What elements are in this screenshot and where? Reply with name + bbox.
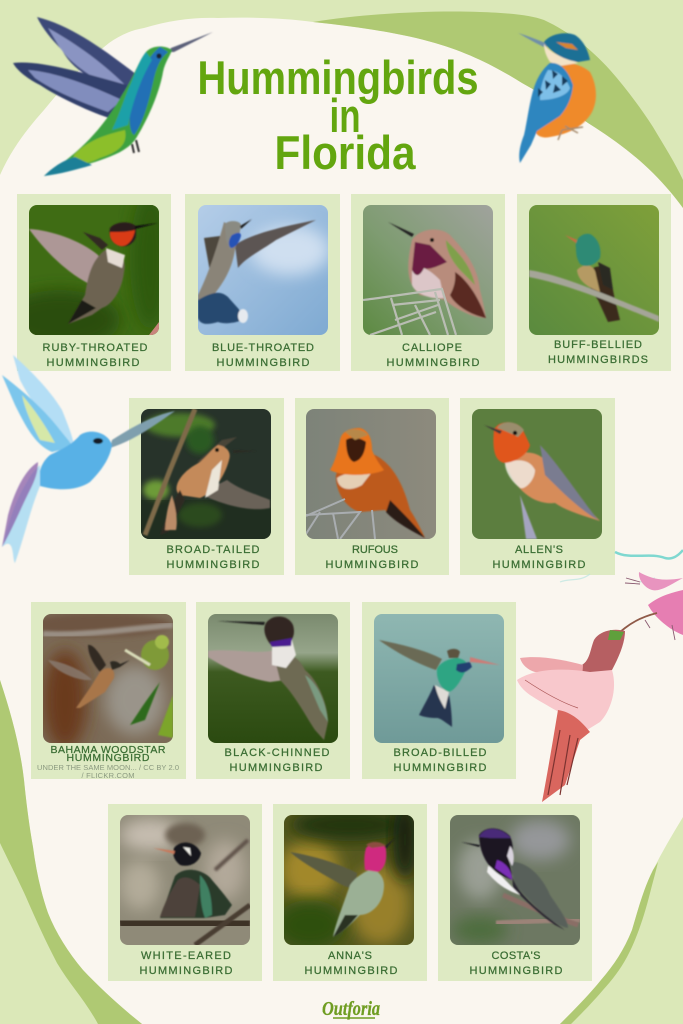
card: bahama woodstar hummingbird bbox=[30, 602, 186, 780]
card: ruby-throated hummingbird bbox=[17, 194, 171, 371]
photo: anna's bbox=[284, 815, 414, 945]
label bbox=[394, 747, 487, 774]
label: BLACK-CHINNED bbox=[224, 747, 330, 759]
card: black-chinned hummingbird bbox=[196, 602, 350, 779]
label: HUMMINGBIRD bbox=[394, 762, 487, 774]
card: blue-throated hummingbird bbox=[185, 194, 340, 371]
label: BAHAMA WOODSTAR bbox=[50, 744, 166, 756]
label bbox=[470, 950, 563, 977]
label bbox=[140, 950, 233, 977]
label: HUMMINGBIRD bbox=[386, 357, 480, 369]
photo: ruby-throated bbox=[29, 205, 159, 335]
label: BROAD-TAILED bbox=[166, 544, 260, 556]
label: ALLEN'S bbox=[515, 544, 563, 556]
label: HUMMINGBIRD bbox=[230, 762, 323, 774]
photo: broad-tailed bbox=[141, 409, 271, 539]
label: BROAD-BILLED bbox=[394, 747, 487, 759]
label bbox=[37, 744, 179, 780]
photo: black-chinned bbox=[208, 614, 338, 743]
label: HUMMINGBIRD bbox=[216, 357, 310, 369]
label bbox=[304, 950, 398, 977]
label bbox=[548, 339, 648, 366]
photo: blue-throated bbox=[198, 205, 330, 335]
photo: bahama woodstar bbox=[43, 614, 173, 743]
label bbox=[166, 544, 260, 571]
label: HUMMINGBIRD bbox=[492, 559, 586, 571]
label bbox=[224, 747, 330, 774]
label: HUMMINGBIRD bbox=[326, 559, 419, 571]
photo: calliope bbox=[363, 205, 493, 335]
label: HUMMINGBIRD bbox=[140, 965, 233, 977]
label: / FLICKR.COM bbox=[82, 771, 134, 780]
label: BLUE-THROATED bbox=[212, 342, 314, 354]
title: Florida bbox=[274, 126, 416, 179]
label: CALLIOPE bbox=[402, 342, 462, 354]
title bbox=[198, 51, 478, 179]
card: costa's hummingbird bbox=[438, 804, 592, 981]
label bbox=[386, 342, 480, 369]
card: anna's hummingbird bbox=[273, 800, 427, 981]
card: allen's hummingbird bbox=[460, 398, 615, 575]
label bbox=[492, 544, 586, 571]
label: UNDER THE SAME MOON... / CC BY 2.0 bbox=[37, 763, 179, 772]
title: in bbox=[330, 89, 360, 142]
photo: white-eared bbox=[120, 815, 250, 945]
label bbox=[212, 342, 314, 369]
card: broad-billed hummingbird bbox=[362, 602, 516, 779]
card: broad-tailed hummingbird bbox=[129, 398, 284, 575]
card: rufous hummingbird bbox=[295, 398, 449, 575]
card: buff-bellied hummingbirds bbox=[517, 194, 671, 371]
label: HUMMINGBIRD bbox=[46, 357, 140, 369]
label: WHITE-EARED bbox=[141, 950, 231, 962]
label: HUMMINGBIRD bbox=[304, 965, 398, 977]
label: BUFF-BELLIED bbox=[554, 339, 642, 351]
photo: rufous bbox=[306, 409, 436, 539]
photo: allen's bbox=[472, 409, 602, 539]
icon: blue watercolor hummingbird bbox=[2, 355, 175, 563]
logo: Outforia: Outforia bbox=[322, 998, 380, 1020]
title: Hummingbirds bbox=[198, 51, 478, 104]
photo: buff-bellied bbox=[529, 205, 659, 335]
label: RUFOUS bbox=[352, 544, 398, 556]
card: white-eared hummingbird bbox=[108, 804, 262, 981]
label: HUMMINGBIRD bbox=[470, 965, 563, 977]
label: COSTA'S bbox=[492, 950, 540, 962]
label bbox=[42, 342, 148, 369]
label: ANNA'S bbox=[328, 950, 372, 962]
card: calliope hummingbird bbox=[351, 194, 505, 371]
label: HUMMINGBIRD bbox=[166, 559, 260, 571]
icon: pink hummingbird with flowers bbox=[517, 550, 683, 802]
label: RUBY-THROATED bbox=[42, 342, 148, 354]
label bbox=[326, 544, 419, 571]
label: HUMMINGBIRD bbox=[66, 752, 150, 764]
label: HUMMINGBIRDS bbox=[548, 354, 648, 366]
photo: broad-billed bbox=[374, 614, 504, 743]
icon: kingfisher top right bbox=[518, 33, 596, 163]
photo: costa's bbox=[450, 815, 580, 945]
icon: green hummingbird top left bbox=[13, 17, 213, 176]
